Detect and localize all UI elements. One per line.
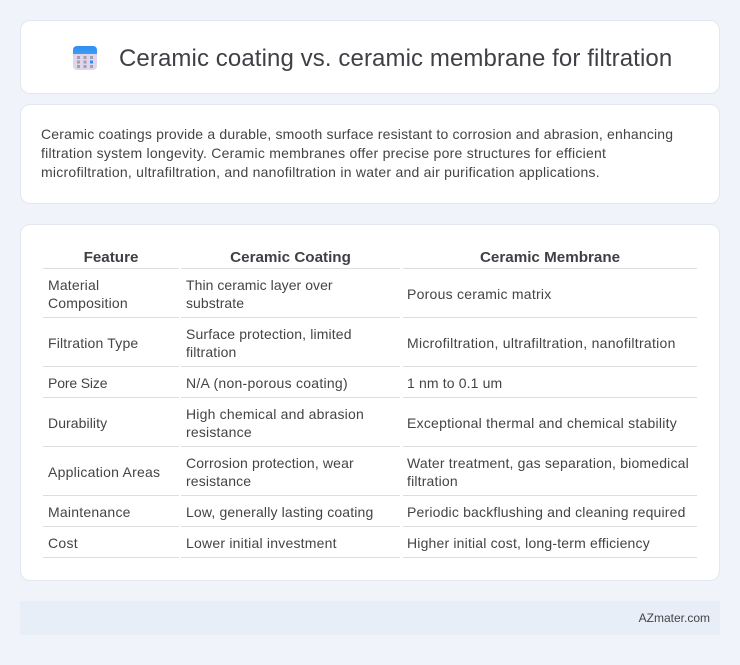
cell: membrane applications: filtration [407, 473, 458, 489]
row: Material Composition: Material [48, 277, 99, 293]
intro text [41, 126, 673, 180]
cell: membrane cost: Higher initial cost, long-term efficiency [407, 535, 650, 551]
cell: membrane maintenance: Periodic backflushing and cleaning required [407, 504, 686, 520]
panel: introduction [20, 104, 720, 204]
cell: coating applications [186, 455, 354, 489]
intro text: Ceramic coatings provide a durable, smooth surface resistant to corrosion and abrasion, enhancing [41, 126, 673, 142]
row: Application Areas: Application Areas [48, 464, 160, 480]
table header: Ceramic Coating: Ceramic Coating [230, 249, 351, 266]
cell: coating durability: High chemical and abrasion [186, 406, 364, 422]
title card [20, 20, 720, 94]
row: Material Composition [48, 277, 128, 311]
cell: coating durability: resistance [186, 424, 252, 440]
cell: coating filtration [186, 326, 352, 360]
cell: coating applications: Corrosion protection, wear [186, 455, 354, 471]
row: Material Composition: Composition [48, 295, 128, 311]
cell: coating composition [186, 277, 333, 311]
cell: membrane durability: Exceptional thermal and chemical stability [407, 415, 677, 431]
cell: coating cost: Lower initial investment [186, 535, 337, 551]
intro text: filtration system longevity. Ceramic membranes offer precise pore structures for efficient [41, 145, 606, 161]
row: Cost: Cost [48, 535, 78, 551]
cell: coating applications: resistance [186, 473, 251, 489]
row: Pore Size: Pore Size [48, 375, 107, 391]
cell: membrane pore size: 1 nm to 0.1 um [407, 375, 502, 391]
row: Filtration Type: Filtration Type [48, 335, 138, 351]
row: Durability: Durability [48, 415, 107, 431]
cell: membrane applications [407, 455, 689, 489]
cell: membrane applications: Water treatment, gas separation, biomedical [407, 455, 689, 471]
cell: coating filtration: Surface protection, limited [186, 326, 352, 342]
cell: coating filtration: filtration [186, 344, 236, 360]
table header: Feature: Feature [84, 249, 138, 266]
row: Maintenance: Maintenance [48, 504, 131, 520]
footer source text: AZmater.com [639, 611, 710, 625]
cell: membrane filtration: Microfiltration, ultrafiltration, nanofiltration [407, 335, 676, 351]
cell: coating composition: substrate [186, 295, 244, 311]
footer bar [20, 601, 720, 635]
title: Ceramic coating vs. ceramic membrane for filtration [119, 45, 672, 72]
cell: coating maintenance: Low, generally lasting coating [186, 504, 373, 520]
cell: coating composition: Thin ceramic layer over [186, 277, 333, 293]
cell: membrane composition: Porous ceramic matrix [407, 286, 552, 302]
cell: coating durability [186, 406, 364, 440]
table header: Ceramic Membrane: Ceramic Membrane [480, 249, 620, 266]
cell: coating pore size: N/A (non-porous coating) [186, 375, 348, 391]
intro text: microfiltration, ultrafiltration, and nanofiltration in water and air purification applications. [41, 164, 600, 180]
panel: comparison table [20, 224, 720, 581]
icon: calendar [73, 46, 97, 70]
